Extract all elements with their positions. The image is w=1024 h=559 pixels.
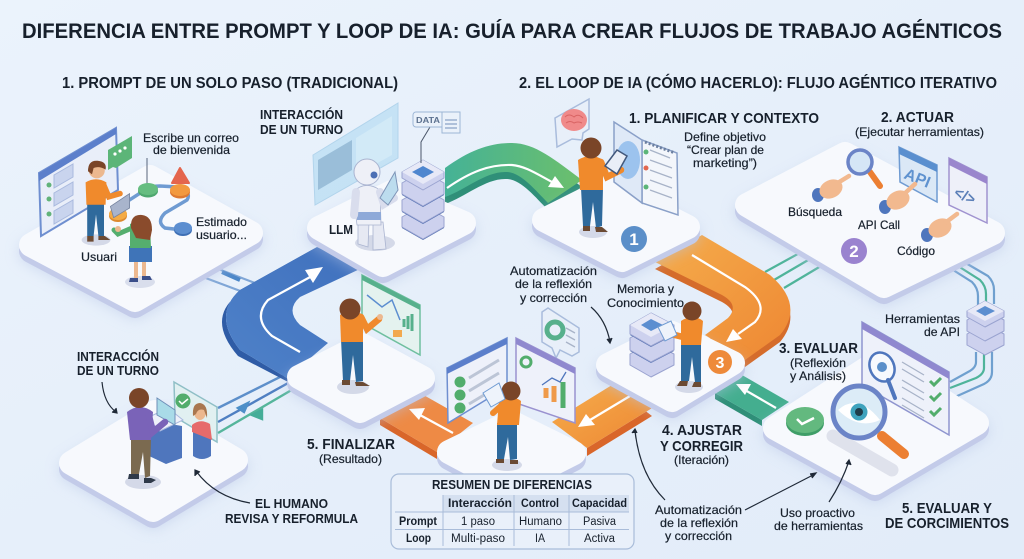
text: automatizacion lower: de la reflexión	[660, 516, 738, 530]
ribbon: orange arrow memoria to ajuste	[552, 385, 652, 456]
label: prompt example: de bienvenida	[153, 143, 230, 157]
person: adjuster	[483, 382, 522, 471]
heading: evaluar y corcimientos: 5. EVALUAR Y	[902, 500, 992, 517]
table: resumen de diferencias: Activa	[584, 533, 616, 545]
label: interaccion top: DE UN TURNO	[260, 122, 343, 137]
table: resumen de diferencias: Control	[521, 496, 559, 510]
table: resumen de diferencias: 1 paso	[461, 516, 495, 528]
person: user with laptop	[82, 161, 130, 246]
label: estimado: usuario...	[196, 228, 247, 242]
heading: ajustar: Y CORREGIR	[660, 438, 743, 455]
badge: 1	[621, 226, 647, 252]
person: woman in green	[114, 215, 155, 288]
label: usuari: Usuari	[81, 250, 117, 264]
platform: evaluar	[775, 360, 977, 490]
text: uso proactivo: de herramientas	[774, 519, 863, 533]
table: resumen de diferencias: Multi-paso	[451, 533, 505, 545]
icon: workflow screen	[39, 128, 118, 236]
text: herramientas de API: Herramientas	[885, 312, 960, 326]
table: resumen de diferencias: Loop	[406, 531, 431, 545]
icon: brain bubble	[555, 99, 589, 147]
connector lines: lower left to finalizar	[218, 372, 295, 433]
table: resumen de diferencias: Capacidad	[572, 496, 627, 510]
platform: prompt	[31, 177, 251, 307]
heading: finalizar	[307, 436, 395, 466]
person: memory keeper	[658, 302, 703, 393]
heading: actuar: 2. ACTUAR	[881, 109, 954, 126]
arrow: uso proactivo	[829, 460, 851, 502]
icon: API server stack	[967, 301, 1004, 355]
label: interaccion lower	[77, 349, 159, 378]
heading: planificar: 1. PLANIFICAR Y CONTEXTO	[629, 110, 819, 127]
icon: robot	[353, 159, 398, 251]
icon: API window	[899, 147, 937, 202]
label: busqueda: Búsqueda	[788, 205, 842, 219]
label: interaccion top: INTERACCIÓN	[260, 107, 343, 122]
table: resumen de diferencias: Interacción	[448, 496, 512, 510]
connector lines: actuar to API server to evaluar	[950, 262, 994, 397]
text: objetivo: Define objetivo	[684, 130, 766, 144]
icon: data tag	[413, 112, 460, 163]
text: automatizacion upper	[510, 264, 597, 305]
heading: ajustar	[660, 422, 743, 467]
icon: code window	[949, 158, 987, 223]
icon: hand search	[812, 176, 849, 202]
arrow: reflexion to evaluar	[745, 473, 816, 510]
badge: 3	[708, 350, 732, 374]
heading: section 1: 1. PROMPT DE UN SOLO PASO (TRADICIONAL)	[62, 75, 398, 92]
heading: finalizar: (Resultado)	[319, 452, 382, 466]
text: objetivo	[684, 130, 766, 170]
heading: evaluar y corcimientos	[885, 500, 1009, 532]
heading: evaluar: (Reflexión	[790, 356, 846, 370]
text: uso proactivo	[774, 506, 863, 533]
heading: ajustar: 4. AJUSTAR	[662, 422, 742, 439]
text: memoria	[607, 282, 684, 310]
text: automatizacion lower: y corrección	[665, 529, 732, 543]
platform: interaccion humana	[71, 412, 236, 517]
label: estimado	[196, 215, 247, 242]
icon: magnifier	[848, 150, 880, 186]
icon: gear bubble	[542, 308, 579, 358]
text: memoria: Memoria y	[617, 282, 674, 296]
icon: LLM server stack	[402, 160, 444, 240]
arrow: reflexion up	[632, 429, 665, 500]
badge: 2	[841, 238, 867, 264]
panel: holographic dashboard	[313, 103, 398, 205]
text: automatizacion upper: de la reflexión	[515, 277, 592, 291]
arrow: memoria to server	[591, 307, 612, 343]
heading: actuar: (Ejecutar herramientas)	[855, 125, 984, 139]
icon: hand API	[879, 184, 915, 214]
platform: actuar	[747, 154, 993, 293]
heading: evaluar y corcimientos: DE CORCIMIENTOS	[885, 515, 1009, 532]
heading: actuar	[855, 109, 984, 139]
arrow: humano	[195, 470, 250, 503]
icon: green check disc	[786, 407, 824, 436]
badge: 3: 3	[716, 355, 725, 372]
label: prompt example	[143, 131, 239, 157]
person: woman at pillar	[192, 403, 212, 459]
person: planner with clipboard	[578, 138, 627, 238]
icon: hand code	[921, 214, 957, 242]
label: LLM: LLM	[329, 223, 353, 237]
platform: memoria	[608, 333, 733, 407]
panel: evaluation screen	[862, 322, 949, 435]
connector lines: prompt to blue ribbon	[203, 267, 255, 292]
label: estimado: Estimado	[196, 215, 247, 229]
text: automatizacion lower: Automatización	[655, 503, 742, 517]
label: humano: REVISA Y REFORMULA	[225, 511, 359, 526]
label: API call: API Call	[858, 218, 900, 232]
ribbon: green arrow evaluar to memoria	[715, 375, 789, 426]
ribbon: blue arrow finalizar to LLM	[222, 247, 362, 384]
panel: bar chart screen	[516, 338, 575, 423]
text: objetivo: “Crear plan de	[687, 143, 764, 157]
person: purple user	[125, 388, 165, 489]
label: humano: EL HUMANO	[255, 496, 328, 511]
panel: approval screen	[174, 382, 217, 442]
text: uso proactivo: Uso proactivo	[780, 506, 855, 520]
platform: planificar	[544, 187, 688, 267]
table: resumen de diferencias: Pasiva	[583, 516, 617, 528]
text: memoria: Conocimiento	[607, 296, 684, 310]
ribbon: orange arrow ajuste to finalizar	[380, 393, 473, 459]
label: interaccion lower: DE UN TURNO	[77, 363, 159, 378]
heading: ajustar: (Iteración)	[674, 453, 729, 467]
table: resumen de diferencias: IA	[535, 533, 545, 545]
text: herramientas de API: de API	[924, 325, 960, 339]
flow diagram	[109, 158, 192, 236]
connector lines: orange ribbon to actuar	[765, 250, 826, 288]
ribbon: green arrow LLM to planificar	[445, 143, 582, 210]
person: finalizer	[337, 298, 383, 394]
text: automatizacion upper: y corrección	[520, 291, 587, 305]
title: DIFERENCIA ENTRE PROMPT Y LOOP DE IA: GUÍA PARA CREAR FLUJOS DE TRABAJO AGÉNTICOS	[22, 20, 1002, 43]
heading: finalizar: 5. FINALIZAR	[307, 436, 395, 453]
icon: notebook	[614, 122, 678, 215]
icon: code window: </>	[951, 184, 978, 209]
badge: 2: 2	[849, 242, 859, 261]
text: automatizacion lower	[655, 503, 742, 543]
label: interaccion top	[260, 107, 343, 137]
label: prompt example: Escribe un correo	[143, 131, 239, 145]
text: herramientas de API	[885, 312, 960, 339]
heading: evaluar	[779, 340, 858, 383]
icon: big magnifier with eye	[833, 386, 904, 470]
icon: data tag: DATA	[416, 115, 440, 125]
badge: 1: 1	[629, 230, 639, 249]
table: resumen de diferencias: Humano	[519, 516, 562, 528]
heading: evaluar: 3. EVALUAR	[779, 340, 858, 357]
label: humano	[225, 496, 359, 526]
heading: evaluar: y Análisis)	[790, 369, 846, 383]
icon: API window: API	[902, 166, 933, 192]
ribbon: orange arrow planificar to memoria	[655, 235, 790, 367]
icon: memory server stack	[630, 313, 674, 377]
table: resumen de diferencias: Prompt	[399, 514, 437, 528]
text: objetivo: marketing”)	[693, 156, 757, 170]
arrow: interaccion	[102, 382, 117, 413]
icon: chat bubble	[108, 136, 132, 170]
label: interaccion lower: INTERACCIÓN	[77, 349, 159, 364]
text: automatizacion upper: Automatización	[510, 264, 597, 278]
panel: checklist screen	[447, 338, 507, 423]
icon: kiosk desk with laptop	[147, 398, 183, 464]
table: resumen de diferencias: RESUMEN DE DIFERENCIAS	[432, 478, 592, 492]
platform: LLM	[319, 192, 464, 272]
panel: finalizar chart screen	[362, 275, 420, 355]
table: resumen de diferencias	[391, 474, 634, 549]
platform: ajustar	[449, 422, 574, 491]
platform: finalizar	[299, 345, 423, 418]
label: codigo: Código	[897, 244, 935, 258]
